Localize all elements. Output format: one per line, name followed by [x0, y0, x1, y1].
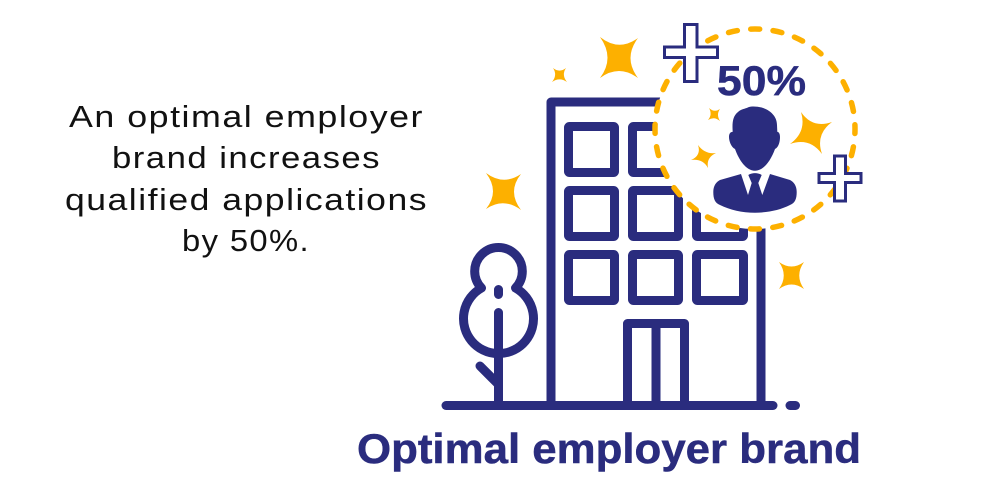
text block: 50% statement: brand increases [112, 140, 381, 175]
icon: plus top left [664, 24, 718, 82]
icon: plus right [819, 156, 861, 201]
callout value: 50% [717, 57, 806, 104]
icon: tree [463, 248, 533, 405]
text block: 50% statement: An optimal employer [69, 99, 424, 134]
text block: 50% statement: qualified applications [65, 182, 428, 217]
sparkles inside the callout [691, 108, 832, 168]
ground line [446, 401, 796, 410]
text block: 50% statement [65, 99, 428, 258]
heading: Optimal employer brand [357, 425, 861, 472]
sparkles around the building [486, 37, 804, 289]
icon: building [551, 102, 761, 405]
callout: dashed circle [655, 29, 855, 229]
text block: 50% statement: by 50%. [182, 223, 310, 258]
icon: person [713, 107, 797, 213]
